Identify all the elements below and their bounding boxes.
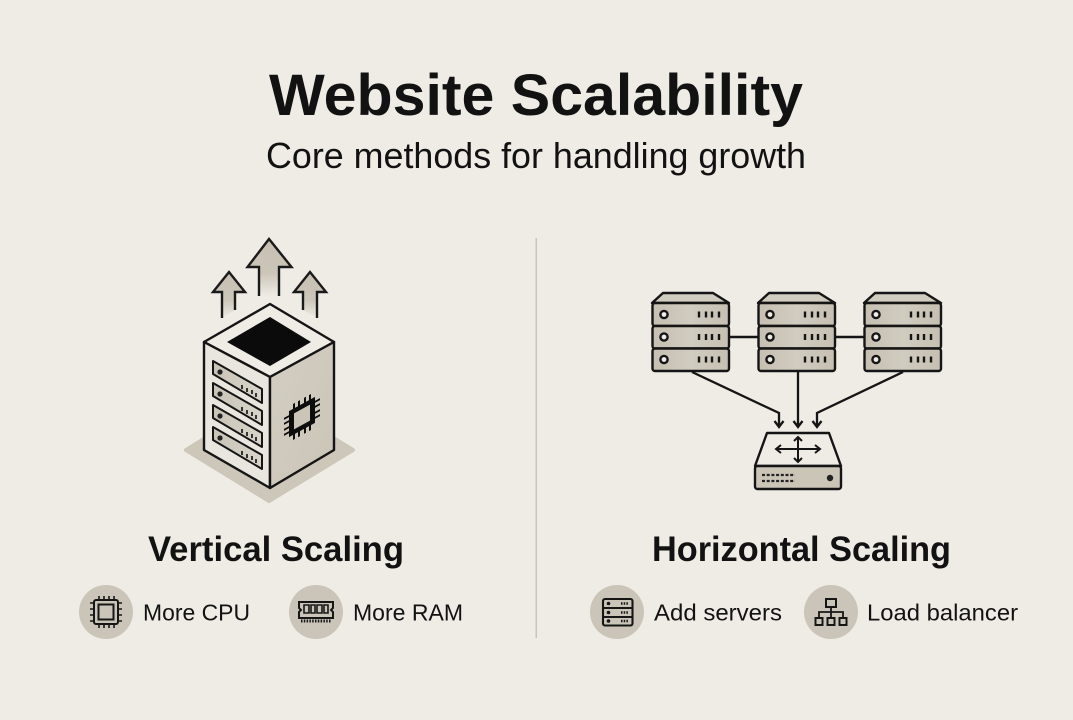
slot lights — [217, 369, 223, 441]
item: more ram — [289, 585, 463, 639]
icon: chip on tower side — [284, 389, 320, 445]
server stack 3 — [864, 293, 941, 371]
server stack 1 — [652, 293, 729, 371]
icon: four-way arrows — [776, 437, 820, 462]
panel: horizontal scaling — [590, 293, 1018, 639]
icon: network tree — [804, 585, 858, 639]
item: load balancer — [804, 585, 1018, 639]
title: Website Scalability — [269, 63, 803, 128]
illustration: server tower with up arrows — [186, 239, 353, 501]
arrow: server 2 to balancer — [794, 372, 802, 427]
vertical divider — [536, 238, 537, 638]
arrow: right up — [294, 272, 326, 318]
slot ticks — [242, 385, 256, 463]
icon: cpu — [79, 585, 133, 639]
icon: ram — [289, 585, 343, 639]
load balancer device — [755, 433, 841, 489]
label: more ram: More RAM — [353, 600, 463, 626]
label: add servers: Add servers — [654, 600, 782, 626]
top black panel — [227, 317, 311, 366]
subtitle: Core methods for handling growth — [266, 135, 806, 176]
heading: horizontal scaling: Horizontal Scaling — [652, 530, 951, 569]
label: more cpu: More CPU — [143, 600, 250, 626]
icon: servers — [590, 585, 644, 639]
item: more cpu — [79, 585, 250, 639]
panel: vertical scaling — [79, 239, 463, 639]
heading: vertical scaling: Vertical Scaling — [148, 530, 404, 569]
arrow: center up — [247, 239, 292, 296]
rack slots — [213, 361, 262, 469]
illustration: server cluster and load balancer — [652, 293, 941, 489]
server stack 2 — [758, 293, 835, 371]
server tower body — [204, 304, 334, 488]
item: add servers — [590, 585, 782, 639]
arrow: server 1 to balancer — [692, 372, 784, 427]
label: load balancer: Load balancer — [867, 600, 1018, 626]
arrow: left up — [213, 272, 245, 318]
connectors between servers — [729, 336, 864, 338]
floor shadow — [186, 399, 353, 501]
arrow: server 3 to balancer — [812, 372, 903, 427]
